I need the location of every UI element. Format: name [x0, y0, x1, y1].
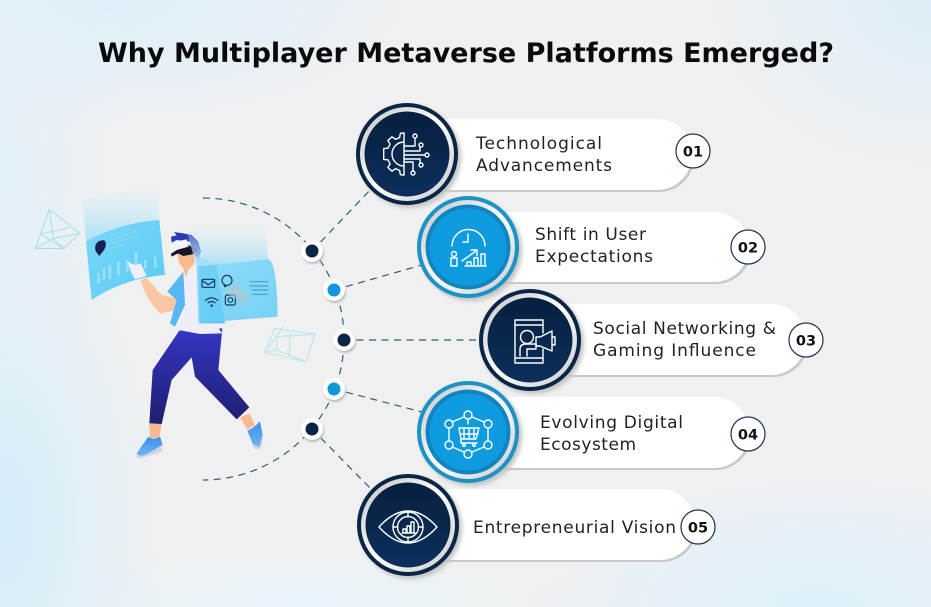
dashed arc connecting the dots — [203, 198, 344, 480]
dot 4 — [323, 378, 346, 402]
icon: phone with person and megaphone — [515, 320, 555, 363]
glove hand — [127, 262, 147, 279]
number badge: 04 — [738, 428, 758, 444]
jacket — [167, 272, 185, 327]
item 03: Social Networking & Gaming Influence — [479, 289, 823, 394]
label — [540, 413, 683, 455]
timeline dots — [301, 240, 356, 442]
label: Expectations — [535, 247, 653, 267]
icon: eye with chart — [379, 511, 437, 543]
item 01: Technological Advancements — [356, 103, 710, 208]
label: Evolving Digital — [540, 413, 683, 433]
item 05: Entrepreneurial Vision — [357, 474, 715, 579]
label: Advancements — [476, 156, 612, 176]
wireframe pyramid — [35, 209, 80, 249]
item 04: Evolving Digital Ecosystem — [417, 381, 765, 486]
shoe shadows — [135, 437, 263, 458]
number badge — [731, 417, 765, 451]
shoes — [137, 437, 163, 456]
icon: shopping cart network — [445, 411, 492, 458]
label: Shift in User — [535, 225, 646, 245]
label — [535, 225, 653, 267]
number badge — [789, 323, 823, 357]
illustration: person in VR headset with floating panels — [35, 183, 315, 458]
left floating panel — [82, 183, 165, 300]
item 02: Shift in User Expectations — [417, 196, 765, 301]
dot 5 — [301, 418, 324, 442]
label — [593, 319, 776, 361]
dot 2 — [323, 279, 346, 303]
label: Gaming Influence — [593, 341, 756, 361]
dot 3 — [333, 329, 356, 353]
number badge — [676, 134, 710, 168]
wireframe cube — [264, 326, 315, 362]
title: Why Multiplayer Metaverse Platforms Emerged? — [98, 38, 834, 69]
number badge: 03 — [796, 334, 816, 350]
label — [475, 134, 612, 176]
neck and face — [177, 251, 195, 277]
label: Ecosystem — [540, 435, 636, 455]
dashed connectors from dots to circles — [312, 188, 482, 490]
dot 1 — [301, 240, 324, 264]
person — [127, 232, 263, 458]
number badge: 05 — [688, 520, 708, 536]
VR headset — [171, 244, 198, 257]
icon: gear with circuit — [384, 133, 429, 175]
icon: clock, person and growth bars — [451, 230, 486, 266]
hair — [171, 232, 201, 260]
shirt — [178, 263, 222, 334]
number badge: 02 — [738, 240, 758, 256]
label: Entrepreneurial Vision — [473, 518, 676, 538]
right floating panel — [183, 220, 278, 323]
left leg and right leg trousers — [149, 328, 249, 424]
number badge — [731, 230, 765, 264]
ankles — [149, 413, 255, 438]
number badge — [681, 510, 715, 544]
label: Social Networking & — [593, 319, 776, 339]
number badge: 01 — [683, 144, 703, 160]
arm — [141, 278, 177, 313]
label: Technological — [475, 134, 602, 154]
